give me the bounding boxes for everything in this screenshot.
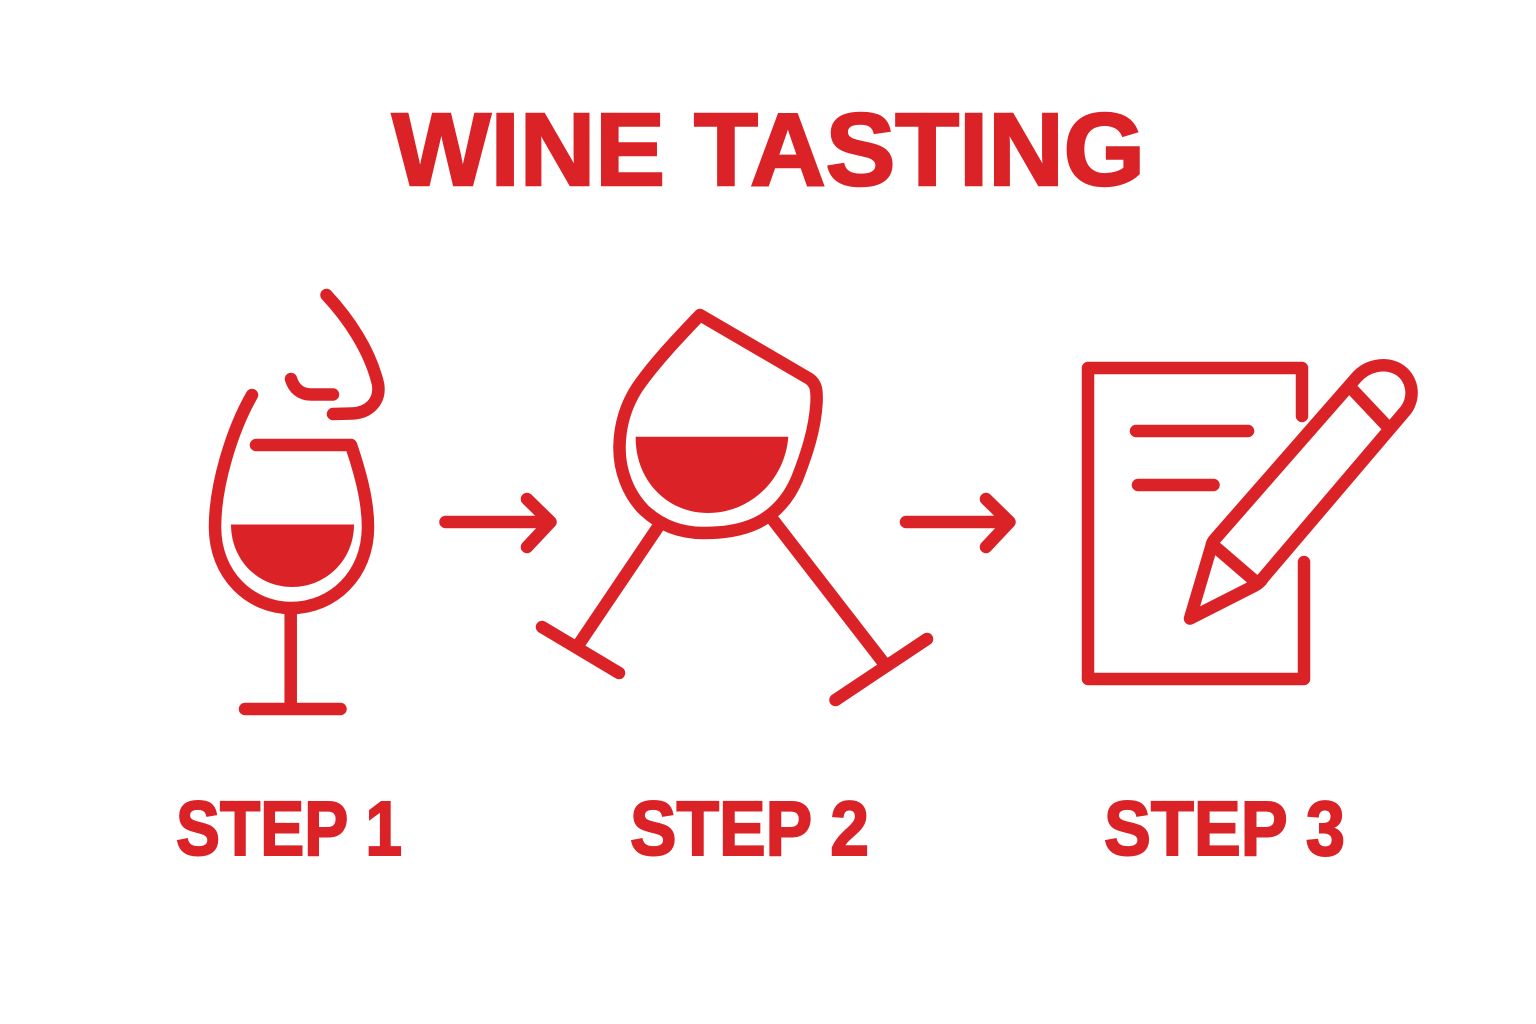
pencil ferrule bbox=[1351, 388, 1385, 424]
glass bowl bbox=[215, 395, 368, 608]
notepad page bbox=[1088, 368, 1304, 679]
label: step 2: STEP 2 bbox=[630, 786, 869, 872]
wine fill bbox=[636, 437, 788, 513]
right stem bbox=[770, 516, 883, 662]
right base bbox=[836, 639, 927, 700]
arrow: step 1 to step 2 bbox=[446, 499, 550, 547]
left stem bbox=[579, 524, 660, 644]
label: step 1: STEP 1 bbox=[176, 786, 402, 872]
left base bbox=[542, 627, 619, 673]
wine fill bbox=[231, 524, 354, 587]
label: step 3: STEP 3 bbox=[1104, 786, 1345, 872]
title: WINE TASTING bbox=[392, 92, 1145, 207]
nostril bbox=[291, 379, 333, 394]
icon: tilted wine glass bbox=[542, 315, 927, 700]
icon: nose above wine glass bbox=[215, 295, 378, 709]
tilted bowl bbox=[619, 315, 817, 533]
arrow: step 2 to step 3 bbox=[906, 499, 1010, 547]
nose outline bbox=[326, 295, 378, 414]
stem bbox=[284, 610, 297, 708]
pencil tip divider bbox=[1216, 548, 1256, 582]
base bbox=[245, 703, 340, 715]
icon: notepad and pencil bbox=[1088, 365, 1412, 679]
pencil body bbox=[1190, 365, 1412, 618]
note line 2 bbox=[1138, 479, 1214, 491]
note line 1 bbox=[1136, 425, 1248, 437]
